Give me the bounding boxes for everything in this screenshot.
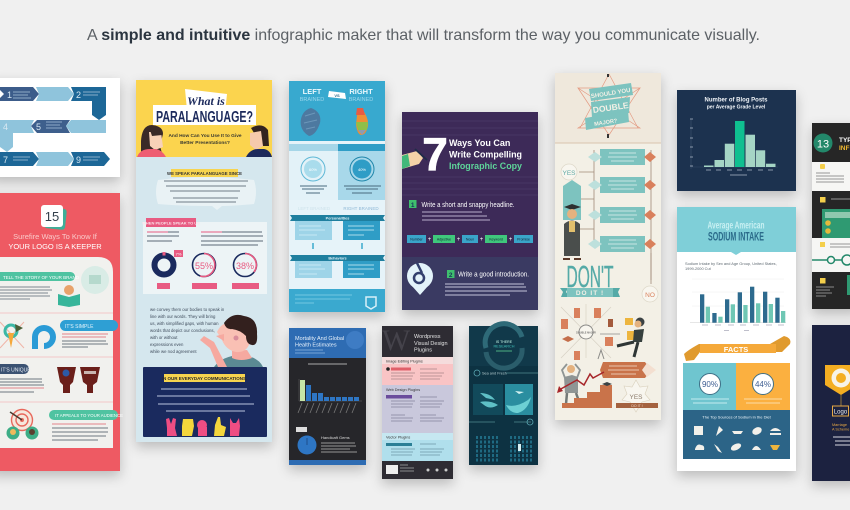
text block: us, with simplified gaps, with human bbox=[150, 321, 219, 326]
heading: Surefire Ways To Know If bbox=[13, 232, 98, 241]
panel: everyday communications bbox=[143, 367, 267, 437]
heading bbox=[8, 232, 102, 251]
headline formula boxes: + bbox=[480, 237, 484, 243]
chart: left percent ring: 60% bbox=[309, 167, 317, 172]
red decline arrow bbox=[557, 372, 604, 393]
subtitle: Better Presentations? bbox=[180, 140, 230, 146]
donut chart: 7%: 7% bbox=[176, 252, 182, 256]
title ribbons bbox=[153, 89, 256, 126]
chart description bbox=[685, 261, 777, 271]
flow ribbon: 2 bbox=[76, 90, 81, 100]
text block: line with our words. They will bring bbox=[150, 314, 216, 319]
icon: writing hand bbox=[402, 149, 427, 169]
facts ribbon: FACTS bbox=[724, 345, 748, 354]
section: personalities bbox=[290, 215, 385, 240]
header ring bbox=[469, 324, 538, 368]
chart: left percent ring bbox=[301, 157, 325, 181]
pictogram grid bbox=[477, 436, 531, 462]
body text: Handicaft Gems bbox=[321, 435, 350, 440]
stats panel: WHEN PEOPLE SPEAK TO US bbox=[142, 220, 200, 226]
panel: wordpress plugins: W bbox=[382, 324, 411, 357]
panel: mortality and global health: Health Estimates bbox=[295, 342, 337, 348]
headline formula boxes bbox=[407, 235, 533, 243]
text block: words that depict our conclusions, bbox=[150, 328, 215, 333]
section: image editing: Image Editing Plugins bbox=[386, 360, 423, 364]
orange text: Marriage bbox=[832, 423, 847, 427]
header bbox=[289, 81, 385, 141]
decision flow bbox=[579, 149, 656, 280]
heading: Infographic Copy bbox=[449, 161, 522, 171]
flow ribbon: 7 bbox=[3, 155, 8, 165]
panel: logo keeper infographic bbox=[0, 193, 123, 471]
section: web design: Web Design Plugins bbox=[386, 388, 420, 392]
icon: left brain bbox=[301, 108, 320, 136]
title ribbons: What is bbox=[187, 94, 225, 108]
subtitle bbox=[168, 134, 242, 144]
ribbons: should you double major: DOUBLE bbox=[592, 100, 629, 115]
panel: mortality and global health: Mortality And Global bbox=[295, 336, 344, 342]
chart title bbox=[704, 98, 768, 110]
no bubble bbox=[642, 253, 658, 302]
headline formula boxes: + bbox=[428, 237, 432, 243]
panel: double major infographic bbox=[555, 73, 661, 420]
yellow header bbox=[136, 80, 272, 157]
icon: right brain bbox=[356, 108, 368, 135]
text block: we convey them our bodies to speak in bbox=[150, 307, 225, 312]
section: vector plugins: Vector Plugins bbox=[386, 436, 410, 440]
heading: YOUR LOGO IS A KEEPER bbox=[8, 242, 102, 251]
sub heading bbox=[298, 206, 379, 211]
step 2 band: 2 bbox=[449, 272, 453, 279]
stairs bbox=[562, 382, 612, 408]
comparison columns bbox=[289, 144, 338, 151]
panel: left vs right brained: BRAINED bbox=[349, 97, 373, 103]
icon: target bbox=[6, 410, 38, 440]
heading bbox=[449, 138, 522, 171]
step 1: Write a short and snappy headline. bbox=[422, 202, 515, 209]
header bbox=[555, 73, 661, 143]
panel: sodium intake bbox=[677, 207, 796, 471]
pill: story bbox=[0, 272, 80, 281]
tag bbox=[296, 427, 307, 432]
section: behaviors: Behaviors bbox=[328, 256, 347, 260]
panel: blog posts histogram bbox=[677, 90, 796, 191]
top sources of sodium bbox=[683, 410, 790, 459]
text block: expressions even bbox=[150, 342, 184, 347]
step 1: 1 bbox=[411, 202, 415, 209]
sub heading: LEFT BRAINED bbox=[298, 206, 331, 211]
section: behaviors bbox=[290, 255, 385, 278]
section: image editing bbox=[382, 357, 453, 385]
bullets bbox=[833, 437, 850, 445]
dark section c bbox=[816, 275, 850, 296]
big number 7: 7 bbox=[422, 128, 448, 180]
icon wheel: DOUBLE MAJOR bbox=[576, 332, 596, 334]
panel: paralanguage infographic bbox=[136, 80, 272, 442]
ribbons: should you double major: SHOULD YOU bbox=[591, 88, 631, 100]
panel: left vs right brained bbox=[289, 81, 385, 312]
sub heading: RIGHT BRAINED bbox=[343, 206, 379, 211]
panel: 7 ways infographic copy bbox=[402, 112, 538, 310]
icon: brand story bbox=[58, 266, 109, 307]
number badge 13 bbox=[814, 134, 832, 152]
heading: INF bbox=[839, 145, 850, 152]
ring chart: 38%: 38% bbox=[236, 261, 254, 271]
title: A simple and intuitive infographic maker that will transform the way you communicate visually. bbox=[87, 27, 760, 44]
header ring: RESEARCH bbox=[493, 344, 515, 348]
vs ribbon bbox=[328, 91, 346, 99]
fact: 90 percent bbox=[683, 363, 736, 410]
section: web design bbox=[386, 388, 444, 421]
number badge 13: 13 bbox=[817, 138, 829, 150]
running man bbox=[600, 318, 644, 357]
food icons bbox=[694, 426, 781, 453]
orange text: A Scheme bbox=[832, 428, 849, 432]
text block: with or without bbox=[150, 335, 178, 340]
icon: pinwheel bbox=[0, 322, 24, 348]
heading: Write Compelling bbox=[449, 150, 522, 160]
heading bbox=[839, 137, 850, 152]
ring chart: 55%: 55% bbox=[195, 261, 213, 271]
panel: everyday communications: IN OUR EVERYDAY COMMUNICATIONS, bbox=[162, 376, 247, 381]
panel: wordpress plugins: Wordpress bbox=[414, 334, 441, 340]
tag: paralanguage since: WE SPEAK PARALANGUAGE SINCE bbox=[167, 171, 242, 176]
section: vector plugins bbox=[382, 433, 453, 461]
flow ribbon: 4 bbox=[3, 122, 8, 132]
icon wheel bbox=[561, 304, 613, 360]
icon: blue clock circle bbox=[298, 436, 316, 454]
big don't: DON'T bbox=[566, 259, 614, 294]
flow ribbon bbox=[0, 87, 110, 166]
graduate figure bbox=[563, 180, 581, 260]
section heading: Sea and Fresh bbox=[482, 372, 507, 376]
orange text bbox=[832, 423, 849, 432]
step 2 band bbox=[402, 257, 538, 310]
white section a bbox=[812, 162, 850, 191]
teal header bbox=[677, 207, 796, 255]
star lines bbox=[578, 74, 640, 135]
header bbox=[382, 326, 453, 357]
histogram bbox=[690, 119, 778, 175]
icon: man speaker bbox=[246, 125, 272, 157]
headline formula boxes: Noun bbox=[466, 238, 474, 242]
pill: audience: IT APPEALS TO YOUR AUDIENCE bbox=[55, 413, 123, 418]
stressed man bbox=[562, 364, 580, 404]
panel: mortality and global health bbox=[289, 328, 366, 465]
panel: left vs right brained: BRAINED bbox=[300, 97, 324, 103]
panel: left vs right brained: LEFT bbox=[303, 87, 322, 96]
pill: audience bbox=[49, 410, 123, 420]
ribbons: should you double major bbox=[585, 83, 633, 130]
yellow logo badge bbox=[825, 365, 850, 406]
icon: cola cups bbox=[57, 367, 100, 393]
big don't bbox=[560, 259, 620, 297]
big don't: DO IT ! bbox=[576, 290, 604, 297]
icon: smiling character bbox=[200, 315, 263, 367]
subtitle: And How Can You Use It to Give bbox=[168, 133, 242, 139]
headline formula boxes: Adjective bbox=[437, 238, 451, 242]
whale panels bbox=[473, 384, 533, 415]
headline formula boxes: Keyword bbox=[489, 238, 503, 242]
dark section with green panel bbox=[820, 197, 850, 238]
chart: right percent ring bbox=[350, 157, 374, 181]
panel: wordpress plugins bbox=[382, 324, 453, 479]
step 2 band: Write a good introduction. bbox=[458, 272, 529, 278]
number badge 15: 15 bbox=[45, 209, 59, 224]
chart: right percent ring: 40% bbox=[358, 167, 366, 172]
logo label bbox=[832, 406, 848, 416]
header ring: IS THERE bbox=[496, 340, 513, 344]
chart description: 1999-2000 Cut bbox=[685, 266, 712, 271]
text block: while we nod agreement bbox=[150, 349, 197, 354]
pill: unique: IT'S UNIQUE bbox=[1, 368, 31, 374]
pill: unique bbox=[0, 364, 31, 374]
white section b with timeline bbox=[812, 238, 850, 272]
fact: 90 percent: 90% bbox=[702, 380, 718, 389]
step 1 bbox=[409, 200, 515, 220]
fact: 44 percent: 44% bbox=[755, 380, 771, 389]
panel: logo design infographic bbox=[812, 325, 850, 481]
flow ribbon: 9 bbox=[76, 155, 81, 165]
logo label: Logo bbox=[834, 410, 848, 416]
section: personalities: Personalities bbox=[326, 216, 349, 220]
bar chart bbox=[298, 379, 362, 413]
vs ribbon: VS bbox=[334, 93, 340, 98]
panel: sodium intake: SODIUM INTAKE bbox=[708, 230, 764, 244]
yes star bbox=[616, 380, 658, 412]
headline formula boxes: + bbox=[509, 237, 513, 243]
ribbons: should you double major: MAJOR? bbox=[594, 118, 618, 128]
panel: process flow card bbox=[0, 78, 120, 177]
chart title: per Average Grade Level bbox=[707, 104, 766, 110]
headline formula boxes: + bbox=[457, 237, 461, 243]
panel: 13 types infographic bbox=[812, 123, 850, 309]
title ribbons: PARALANGUAGE? bbox=[156, 109, 253, 126]
top sources of sodium: The Top Sources of Sodium in the Diet bbox=[702, 414, 772, 420]
blue header bbox=[289, 328, 366, 358]
heading: Ways You Can bbox=[449, 138, 510, 148]
tag: paralanguage since bbox=[167, 169, 242, 177]
icon: ok hand pin bbox=[407, 263, 433, 295]
icon: P logo bbox=[32, 325, 56, 349]
speech bubble bbox=[156, 177, 256, 210]
infographic cards bbox=[0, 73, 850, 481]
yes star: DO IT ! bbox=[631, 404, 643, 408]
number badge 15 bbox=[41, 205, 67, 230]
panel: wordpress plugins: Plugins bbox=[414, 348, 432, 354]
bar chart bbox=[690, 279, 786, 330]
no bubble: NO bbox=[645, 292, 655, 299]
pill: story: TELL THE STORY OF YOUR BRAND bbox=[3, 275, 80, 280]
icons: hand gestures bbox=[166, 417, 240, 436]
flow ribbon: 1 bbox=[7, 90, 12, 100]
pill: simple: IT'S SIMPLE bbox=[65, 324, 94, 330]
fact: 44 percent bbox=[736, 363, 790, 410]
yes star: YES bbox=[629, 394, 643, 401]
box with arrow bbox=[600, 362, 656, 378]
footer bbox=[382, 461, 453, 479]
panel: sodium intake: Average American bbox=[708, 220, 764, 232]
yes bubble bbox=[561, 164, 577, 180]
facts ribbon bbox=[684, 336, 790, 361]
panel: wordpress plugins: Visual Design bbox=[414, 341, 448, 347]
headline formula boxes: Number bbox=[410, 238, 424, 242]
flow ribbon: 5 bbox=[36, 122, 41, 132]
panel: whale infographic bbox=[469, 324, 538, 465]
chart title: Number of Blog Posts bbox=[704, 98, 768, 104]
yes bubble: YES bbox=[562, 170, 576, 177]
white content panel bbox=[0, 257, 113, 448]
chart description: Sodium Intake by Sex and Age Group, United States, bbox=[685, 261, 777, 266]
text block bbox=[150, 307, 225, 354]
panel: left vs right brained: RIGHT bbox=[349, 87, 373, 96]
stats panel bbox=[142, 218, 267, 294]
pill: simple bbox=[60, 320, 118, 331]
footer bbox=[289, 289, 385, 312]
headline formula boxes: Promise bbox=[517, 238, 530, 242]
section heading bbox=[474, 370, 538, 376]
icon: woman speaker bbox=[137, 125, 166, 157]
